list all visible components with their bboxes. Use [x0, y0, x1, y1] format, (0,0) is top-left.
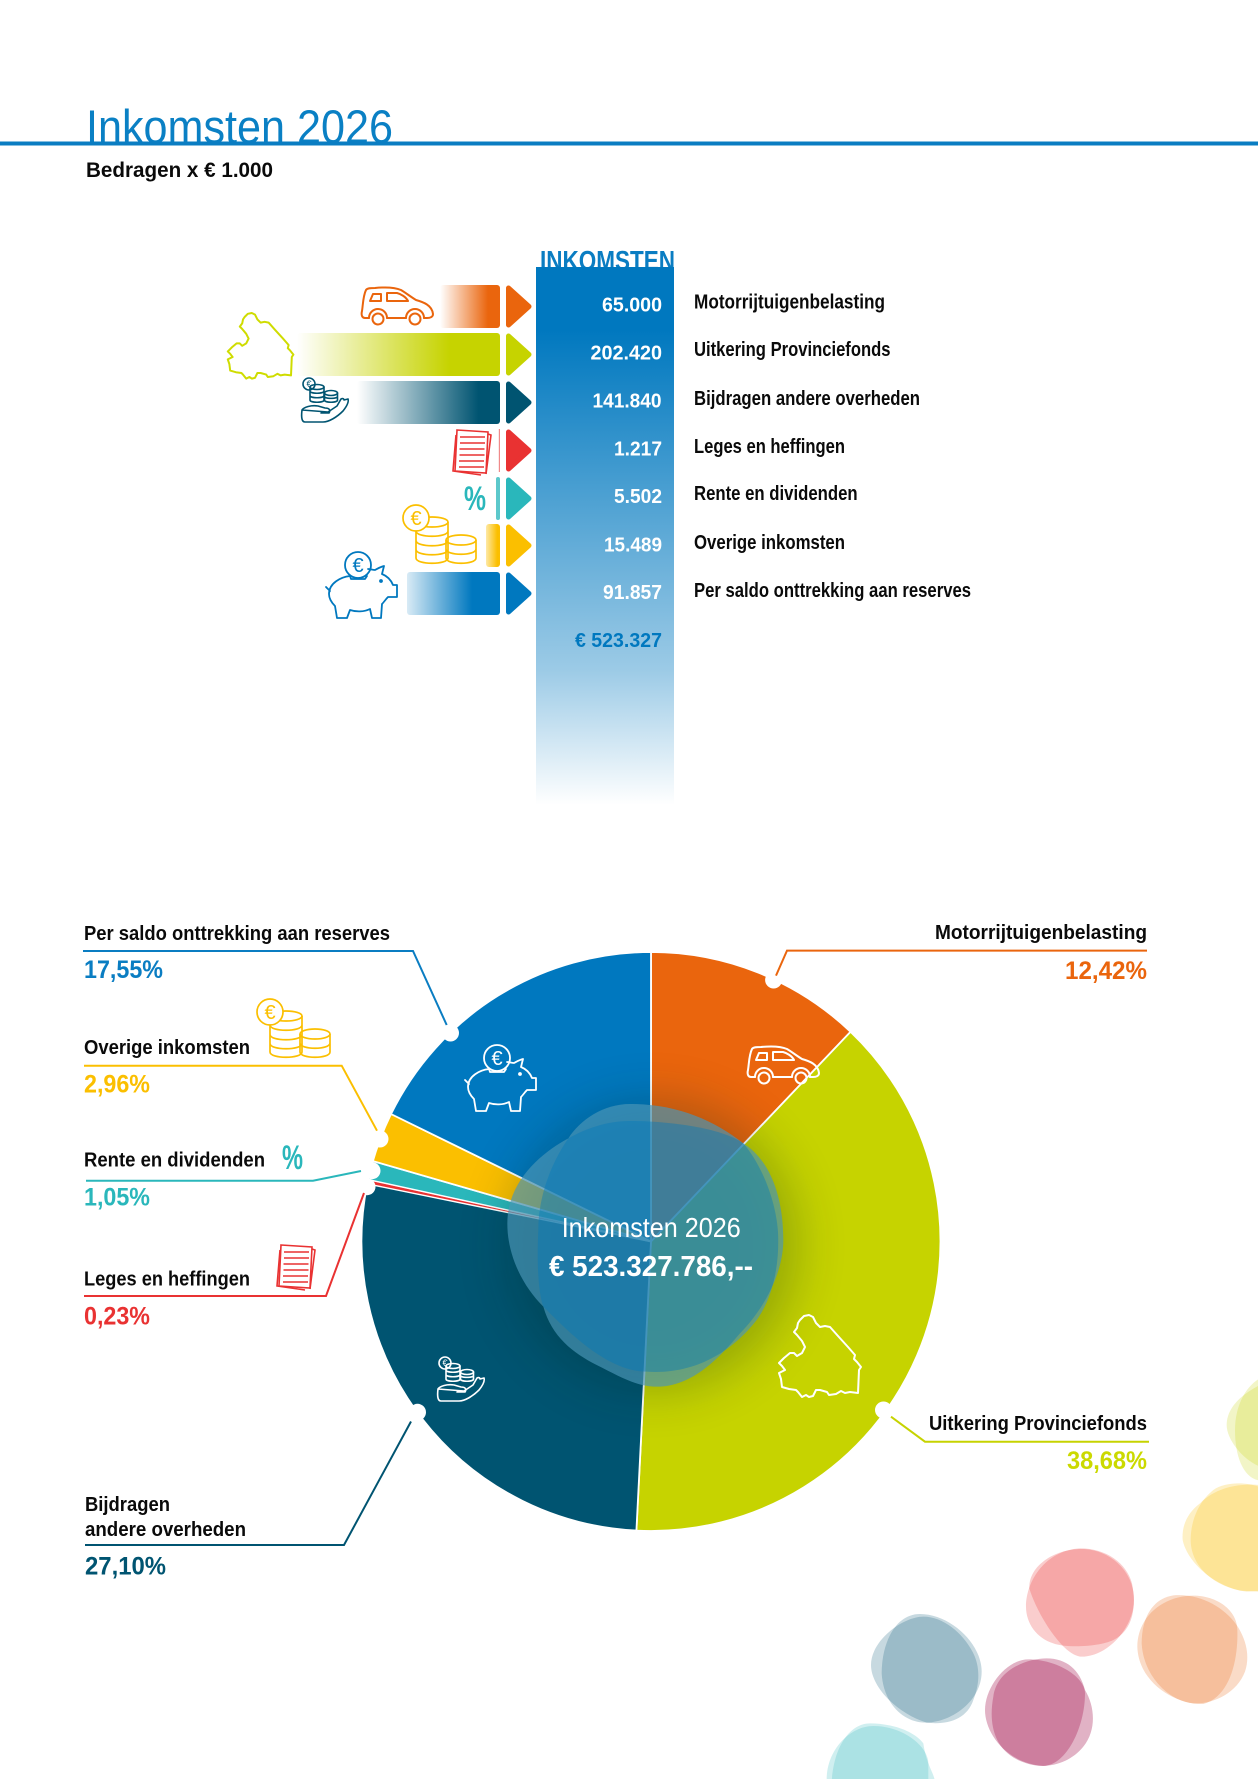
- pie chart: [361, 952, 940, 1531]
- slice: Uitkering Provinciefonds: [636, 1032, 940, 1531]
- label: Rente en dividenden: [694, 483, 858, 505]
- percentage: 1,05%: [84, 1184, 150, 1212]
- slice: Overige inkomsten: [373, 1114, 651, 1242]
- row: Overige inkomsten: [403, 505, 845, 567]
- callout: Motorrijtuigenbelasting: [776, 922, 1147, 985]
- icon: percent: %: [282, 1139, 303, 1177]
- label: Motorrijtuigenbelasting: [694, 292, 885, 314]
- bar: [407, 572, 500, 615]
- leader line: [83, 951, 447, 1025]
- icon: piggy bank white: [465, 1045, 536, 1111]
- centre label: [549, 1212, 753, 1283]
- leader line: [84, 1066, 377, 1131]
- label: Bijdragen andere overheden: [694, 388, 920, 410]
- slice: Motorrijtuigenbelasting: [651, 952, 851, 1242]
- icon: papers: [277, 1245, 315, 1290]
- icon: car white: [748, 1046, 819, 1084]
- label: Overige inkomsten: [694, 532, 845, 554]
- column heading: INKOMSTEN: [540, 245, 675, 276]
- callout: Rente en dividenden: [84, 1139, 361, 1212]
- label: Per saldo onttrekking aan reserves: [694, 580, 971, 602]
- value: 1.217: [614, 438, 662, 460]
- label: Leges en heffingen: [694, 436, 845, 458]
- leader line: [86, 1171, 361, 1181]
- centre shadow: [506, 1099, 798, 1391]
- slice: Leges en heffingen: [367, 1180, 651, 1242]
- percentage: 17,55%: [84, 956, 163, 984]
- row: Motorrijtuigenbelasting: [362, 285, 885, 328]
- arrow: [508, 384, 529, 421]
- icon: percent: %: [464, 480, 486, 518]
- centre total: € 523.327.786,--: [549, 1251, 753, 1283]
- label: Motorrijtuigenbelasting: [935, 922, 1147, 944]
- callout: Bijdragen andere overheden: [85, 1422, 411, 1581]
- label: Uitkering Provinciefonds: [694, 339, 890, 361]
- callout: Overige inkomsten: [84, 999, 377, 1131]
- row: Uitkering Provinciefonds: [228, 313, 891, 379]
- income column: [536, 267, 674, 805]
- total: € 523.327: [575, 630, 662, 652]
- bar: [486, 524, 500, 567]
- arrow: [508, 527, 529, 564]
- percentage: 0,23%: [84, 1302, 150, 1330]
- label: Uitkering Provinciefonds: [929, 1413, 1147, 1435]
- callout: Leges en heffingen: [84, 1193, 364, 1330]
- percentage: 12,42%: [1065, 957, 1147, 985]
- slice: Rente en dividenden: [368, 1161, 651, 1242]
- icon: piggy bank: [326, 552, 397, 618]
- bar: [297, 333, 500, 376]
- percentage: 38,68%: [1067, 1447, 1147, 1475]
- icon: papers: [453, 430, 491, 475]
- icon: coins: [403, 505, 476, 563]
- callout: Uitkering Provinciefonds: [891, 1413, 1149, 1475]
- title: Inkomsten 2026: [86, 100, 393, 153]
- row: Rente en dividenden: [464, 477, 858, 520]
- callout: Per saldo onttrekking aan reserves: [83, 923, 447, 1025]
- background colour blobs: [827, 1378, 1258, 1779]
- label: Overige inkomsten: [84, 1037, 250, 1059]
- value: 91.857: [603, 582, 662, 604]
- income column gradient: [536, 267, 674, 805]
- value: 65.000: [602, 294, 662, 316]
- pie icons: [438, 1045, 861, 1401]
- bar: [499, 429, 500, 472]
- row: Leges en heffingen: [453, 429, 845, 475]
- label: Leges en heffingen: [84, 1269, 250, 1291]
- icon: car: [362, 287, 433, 324]
- slice: Per saldo onttrekking aan reserves: [391, 952, 651, 1242]
- bar: [440, 285, 500, 328]
- arrow: [508, 288, 529, 325]
- leader dots: [358, 972, 892, 1421]
- slice: Bijdragen andere overheden: [361, 1184, 651, 1531]
- icon: hand with coins: [302, 378, 348, 422]
- label line 1: Bijdragen: [85, 1494, 170, 1516]
- percentage: 2,96%: [84, 1071, 150, 1099]
- bar: [357, 381, 500, 424]
- arrow: [508, 432, 529, 469]
- value: 202.420: [590, 342, 662, 364]
- value: 5.502: [614, 486, 662, 508]
- subtitle: Bedragen x € 1.000: [86, 159, 273, 182]
- arrow: [508, 336, 529, 373]
- label: Per saldo onttrekking aan reserves: [84, 923, 390, 945]
- value: 141.840: [592, 390, 662, 412]
- leader line: [85, 1422, 411, 1545]
- leader line: [891, 1417, 1149, 1442]
- centre heading: Inkomsten 2026: [562, 1212, 741, 1243]
- row: Bijdragen andere overheden: [302, 378, 920, 424]
- icon: coins: [257, 999, 330, 1057]
- leader line: [84, 1193, 364, 1296]
- leader line: [776, 951, 1147, 976]
- value: 15.489: [604, 534, 662, 556]
- percentage: 27,10%: [85, 1553, 166, 1581]
- title rule: [0, 142, 1258, 146]
- arrow: [508, 480, 529, 517]
- row: Per saldo onttrekking aan reserves: [326, 552, 971, 618]
- icon: province outline: [228, 313, 293, 379]
- icon: hand white: [438, 1357, 484, 1401]
- icon: province white: [779, 1315, 861, 1397]
- label: Rente en dividenden: [84, 1150, 265, 1172]
- centre blobs: [507, 1104, 783, 1387]
- bar: [496, 477, 500, 520]
- label line 2: andere overheden: [85, 1519, 246, 1541]
- arrow: [508, 575, 529, 612]
